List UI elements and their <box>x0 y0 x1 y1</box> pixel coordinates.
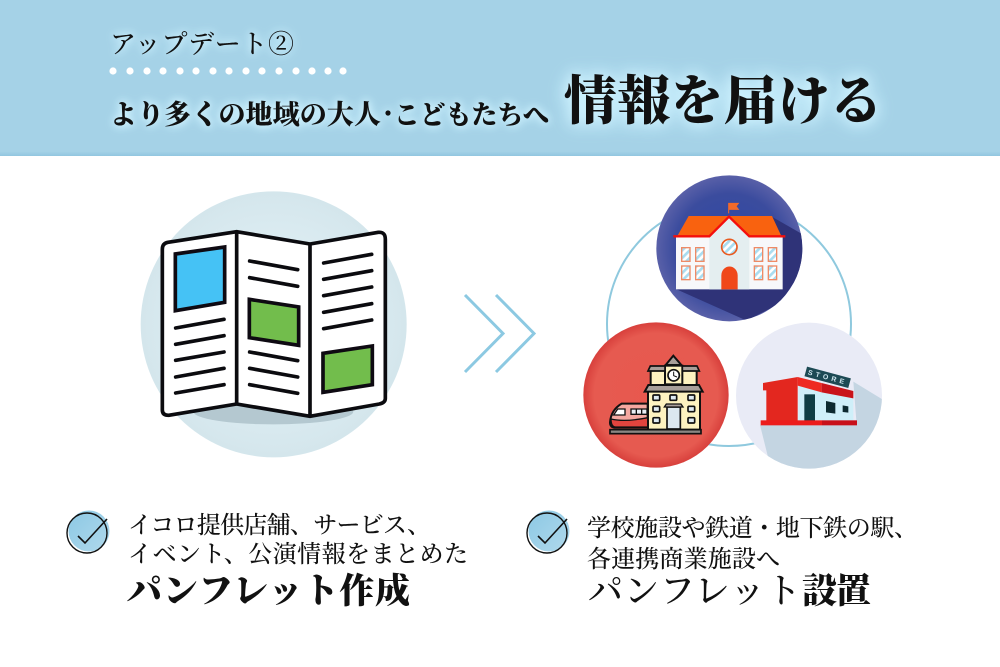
arrow: double chevron <box>465 295 534 372</box>
flag <box>729 203 738 213</box>
caption emphasis prefix: パンフレット <box>588 572 801 611</box>
long shadow <box>760 382 883 472</box>
central gable <box>709 217 749 289</box>
store sign: STORE <box>807 370 848 387</box>
caption line 2: 各連携商業施設へ <box>587 546 780 573</box>
header: subheading: より多くの地域の大人 <box>110 100 381 130</box>
text lines <box>176 254 372 393</box>
platform <box>610 430 701 434</box>
caption line 2: イベント、公演情報をまとめた <box>128 541 468 568</box>
brochure sheet <box>162 232 385 416</box>
circle background <box>656 175 802 321</box>
green image block right <box>323 346 372 392</box>
icon: check badge <box>527 510 570 553</box>
door <box>721 266 738 289</box>
header: subheading: こどもたちへ <box>394 101 549 130</box>
store body <box>798 386 853 421</box>
station upper block <box>651 370 697 385</box>
clock tower <box>665 366 682 384</box>
icon: check badge <box>67 510 110 553</box>
door <box>804 394 815 421</box>
blue image block <box>175 247 225 311</box>
brochure shadow <box>193 399 353 424</box>
circle background <box>583 322 729 468</box>
long shadow <box>677 217 807 321</box>
walls <box>676 237 783 289</box>
clock window <box>722 239 737 255</box>
upper eaves <box>648 366 699 371</box>
caption line 1: イコロ提供店舗、サービス、 <box>128 512 431 539</box>
station door <box>667 407 680 429</box>
header: dotted divider <box>109 67 347 75</box>
windows <box>826 401 835 414</box>
red facade <box>763 377 798 421</box>
background disc <box>141 191 407 457</box>
awning <box>798 377 822 392</box>
connecting ring <box>607 202 851 446</box>
train <box>610 404 648 428</box>
green image block centre <box>249 299 299 345</box>
base <box>761 420 822 425</box>
caption emphasis suffix: 設置 <box>802 572 871 611</box>
caption line 1: 学校施設や鉄道・地下鉄の駅、 <box>587 515 918 542</box>
station windows <box>653 395 695 423</box>
header band <box>0 0 1000 156</box>
icon: school <box>656 175 807 321</box>
panel: left caption <box>67 510 468 611</box>
panel: right caption <box>527 510 918 611</box>
circle background <box>736 323 882 469</box>
clock <box>668 370 679 381</box>
icon: store <box>736 323 883 472</box>
station lower block <box>648 391 700 430</box>
tower cap <box>666 356 681 365</box>
lower eaves <box>645 385 703 392</box>
icon: station and train <box>583 322 729 468</box>
windows <box>682 248 777 280</box>
header: main heading: 情報を届ける <box>564 72 883 131</box>
roof trim <box>673 217 785 236</box>
header: update label: アップデート② <box>110 30 294 59</box>
caption emphasis: パンフレット作成 <box>127 572 410 611</box>
brochure folds <box>237 232 310 416</box>
panel: pamphlet illustration <box>141 191 407 457</box>
roof <box>677 216 781 236</box>
header: subheading <box>110 100 549 130</box>
